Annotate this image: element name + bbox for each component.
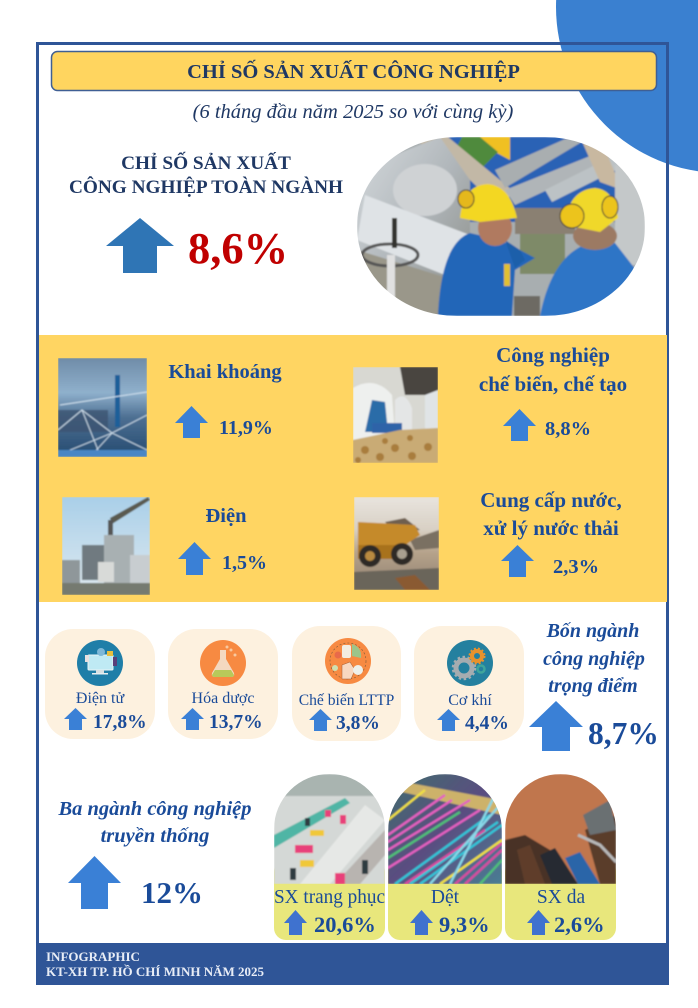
- card: pharma: [168, 629, 278, 739]
- icon: large up arrow: [68, 856, 121, 909]
- icon: food products: [325, 638, 371, 684]
- card: textile: [388, 774, 502, 940]
- overall index heading: CHỈ SỐ SẢN XUẤT: [121, 152, 291, 174]
- sector label: manufacturing: Công nghiệp: [496, 343, 610, 367]
- card: garments: 20,6%: [314, 912, 376, 937]
- photo: leather and tools: [505, 774, 616, 884]
- value: three traditional industries: 12%: [141, 875, 203, 910]
- overall index heading: CÔNG NGHIỆP TOÀN NGÀNH: [69, 176, 343, 198]
- overall value: 8,6%: [188, 223, 288, 273]
- card: leather: 2,6%: [554, 912, 605, 937]
- photo: loom threads: [388, 774, 502, 884]
- icon: computer: [77, 640, 123, 686]
- title banner: CHỈ SỐ SẢN XUẤT CÔNG NGHIỆP: [187, 59, 520, 83]
- title banner: [52, 52, 656, 90]
- card: garments: SX trang phục: [274, 887, 385, 908]
- card: food processing: 3,8%: [336, 713, 380, 734]
- sector label: water supply: xử lý nước thải: [483, 516, 619, 540]
- card: mechanical: Cơ khí: [448, 692, 492, 709]
- card: textile: 9,3%: [439, 912, 490, 937]
- icon: gears: [447, 640, 493, 686]
- value: four key industries: 8,7%: [588, 716, 659, 751]
- sector label: mining: Khai khoáng: [168, 361, 282, 383]
- icon: up arrow: [501, 545, 534, 577]
- photo: mining city network: [58, 358, 147, 457]
- card: electronics: [45, 629, 155, 739]
- card: pharma: Hóa dược: [192, 690, 254, 707]
- card: garments: [274, 774, 385, 940]
- icon: up arrow: [175, 406, 208, 438]
- card: food processing: Chế biến LTTP: [299, 692, 395, 709]
- card: mechanical: 4,4%: [465, 713, 509, 734]
- footer bar: INFOGRAPHIC: [46, 949, 140, 964]
- icon: up arrow: [178, 542, 211, 575]
- card: leather: [505, 774, 616, 940]
- heading: three traditional industries: Ba ngành công nghiệp: [57, 798, 252, 820]
- photo: sewing line: [274, 774, 385, 884]
- decorative blue circle: [556, 0, 698, 173]
- card: leather: SX da: [537, 887, 585, 908]
- icon: flask: [200, 640, 246, 686]
- value: electricity: 1,5%: [222, 552, 267, 574]
- heading: three traditional industries: truyền thống: [101, 825, 209, 847]
- subtitle: (6 tháng đầu năm 2025 so với cùng kỳ): [193, 101, 514, 123]
- card: mechanical: [414, 626, 524, 741]
- footer bar: KT-XH TP. HỒ CHÍ MINH NĂM 2025: [46, 964, 265, 979]
- photo: workers at plant: [357, 137, 645, 316]
- card: electronics: 17,8%: [93, 712, 147, 733]
- value: mining: 11,9%: [219, 417, 273, 439]
- card: pharma: 13,7%: [209, 712, 263, 733]
- footer bar: [36, 943, 669, 983]
- sector label: electricity: Điện: [206, 505, 247, 527]
- icon: large up arrow: [529, 701, 583, 751]
- icon: big up arrow: [106, 218, 174, 273]
- icon: up arrow: [503, 409, 536, 441]
- card: textile: Dệt: [431, 887, 460, 908]
- heading: four key industries: Bốn ngành: [546, 620, 639, 642]
- photo: dump truck: [354, 497, 439, 590]
- photo: food processing workers: [353, 367, 438, 463]
- sector label: water supply: Cung cấp nước,: [480, 488, 622, 512]
- sector label: manufacturing: chế biến, chế tạo: [479, 372, 627, 396]
- value: water supply: 2,3%: [553, 556, 599, 578]
- heading: four key industries: công nghiệp: [543, 648, 645, 670]
- card: food processing: [292, 626, 401, 741]
- photo: electrical transformer: [62, 497, 150, 595]
- panel: yellow sectors band: [39, 335, 667, 602]
- value: manufacturing: 8,8%: [545, 418, 591, 440]
- card: electronics: Điện tử: [76, 690, 125, 707]
- heading: four key industries: trọng điểm: [548, 675, 638, 697]
